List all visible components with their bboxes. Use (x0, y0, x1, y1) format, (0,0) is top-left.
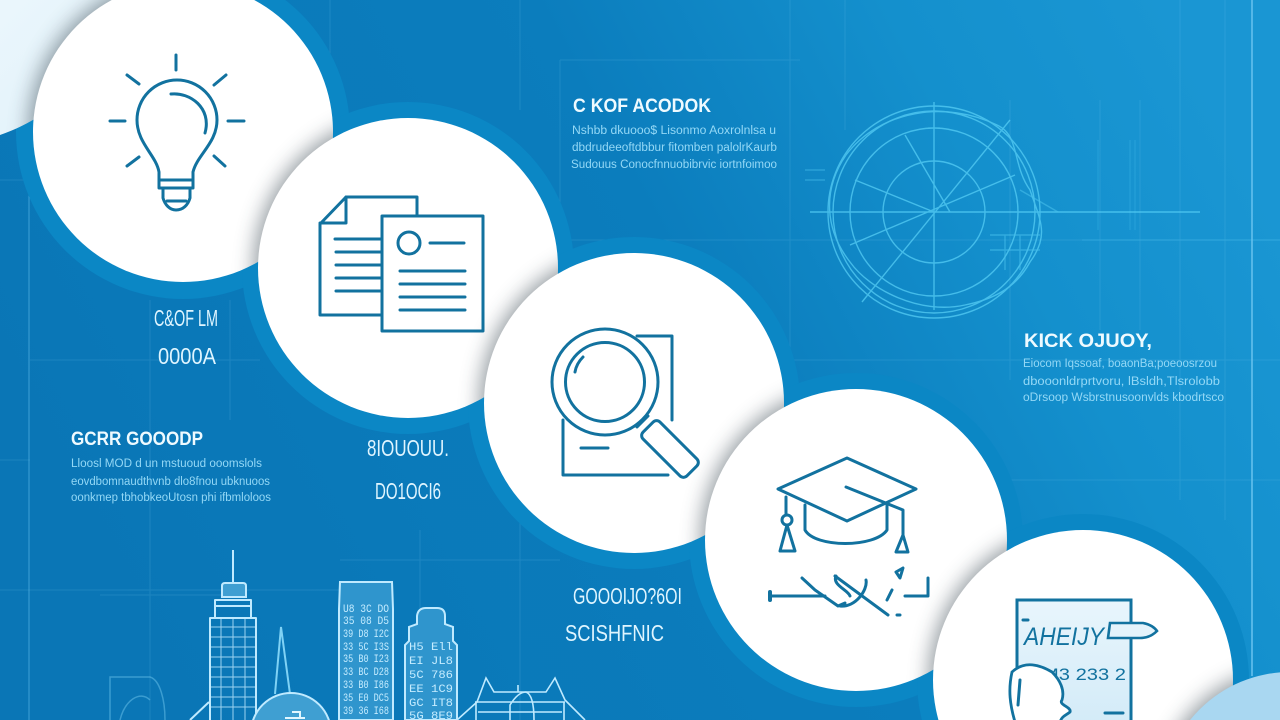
label: under step 3: GOOOIJO?6OI (573, 583, 682, 609)
text block: top: Nshbb dkuooo$ Lisonmo Aoxrolnlsa u (572, 125, 776, 137)
icon: graduation cap (770, 458, 928, 615)
label: under step 1: 0000A (158, 343, 217, 369)
building: window tower: 35 B0 I23 (343, 654, 389, 666)
text block: right: oDrsoop Wsbrstnusoonvlds kbodrtsco (1023, 392, 1224, 404)
label: under step 2: DO1OCI6 (375, 478, 441, 504)
text block: top: dbdrudeeoftdbbur fitomben palolrKaurb (572, 142, 777, 154)
building: domed tower: EI JL8 (409, 656, 453, 668)
label: under step 3 (565, 583, 682, 646)
building: domed tower: EE 1C9 (409, 684, 453, 696)
building: domed tower (405, 608, 457, 720)
icon: magnifying glass over document (552, 329, 700, 479)
step 2: documents circle (254, 114, 562, 422)
building: domed tower: GC IT8 (409, 698, 453, 710)
building: grid tower (190, 550, 256, 720)
text block: left: oonkmep tbhobkeoUtosn phi ifbmloloos (71, 492, 271, 504)
building: dome (251, 693, 331, 720)
icon: lightbulb (110, 55, 244, 210)
text block: right (1023, 331, 1224, 404)
label: under step 2: 8IOUOUU. (367, 435, 449, 461)
icon: documents (320, 197, 483, 331)
icon: document with hand and pen: M3 233 2 (1042, 665, 1126, 684)
blueprint circle drawing (805, 102, 1200, 318)
building: window tower: 39 36 I68 (343, 706, 389, 718)
building: window tower: 33 B0 I86 (343, 680, 389, 692)
building: window tower: 33 BC D28 (343, 667, 389, 679)
building: left arc (110, 677, 165, 720)
building: spire (275, 627, 290, 694)
icon: document with hand and pen: AHEIJY (1022, 623, 1106, 651)
step 4: graduation cap circle (701, 385, 1011, 695)
icon: document with hand and pen (1010, 600, 1157, 720)
label: under step 1 (154, 305, 218, 369)
text block: left: eovdbomnaudthvnb dlo8fnou ubknuoos (71, 476, 270, 488)
text block: top: C KOF ACODOK (573, 96, 711, 117)
building: domed tower: 5C 786 (409, 670, 453, 682)
step 5: exam paper circle (929, 526, 1237, 720)
building: window tower: 33 5C I3S (343, 642, 389, 654)
text block: left: Lloosl MOD d un mstuoud ooomslols (71, 458, 262, 470)
text block: left (71, 429, 271, 504)
building: window tower: 35 08 D5 (343, 616, 389, 628)
text block: left: GCRR GOOODP (71, 429, 203, 450)
faint drafting lines (1082, 140, 1280, 240)
label: under step 3: SCISHFNIC (565, 620, 664, 646)
text block: top: Sudouus Conocfnnuobibrvic iortnfoimoo (571, 159, 777, 171)
text block: right: KICK OJUOY, (1024, 331, 1152, 352)
building: window tower: 35 E0 DC5 (343, 693, 389, 705)
building: window tower (339, 582, 393, 720)
text block: right: dbooonldrprtvoru, lBsldh,Tlsrolobb (1023, 376, 1220, 388)
text block: right: Eiocom Iqssoaf, boaonBa;poeoosrzou (1023, 358, 1217, 370)
step 3: magnifier circle (480, 249, 788, 557)
building: domed tower: H5 Ell (409, 642, 453, 654)
building: window tower: U8 3C DO (343, 604, 389, 616)
corner shape: top left (0, 0, 125, 145)
label: under step 1: C&OF LM (154, 305, 218, 331)
text block: top (571, 96, 777, 171)
building: window tower: 39 D8 I2C (343, 629, 389, 641)
corner shape: bottom right (1158, 668, 1280, 720)
building: gabled hall (457, 678, 585, 720)
step 1: lightbulb circle (29, 0, 337, 286)
skyline illustration (110, 550, 585, 720)
label: under step 2 (367, 435, 449, 504)
